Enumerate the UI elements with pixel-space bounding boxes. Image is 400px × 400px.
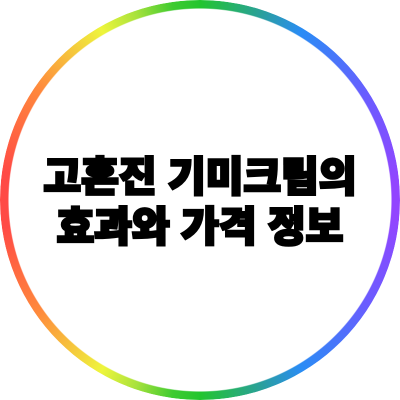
title: 고혼진 기미크림의	[43, 154, 357, 200]
title	[43, 154, 357, 250]
title: 효과와 가격 정보	[57, 204, 343, 250]
